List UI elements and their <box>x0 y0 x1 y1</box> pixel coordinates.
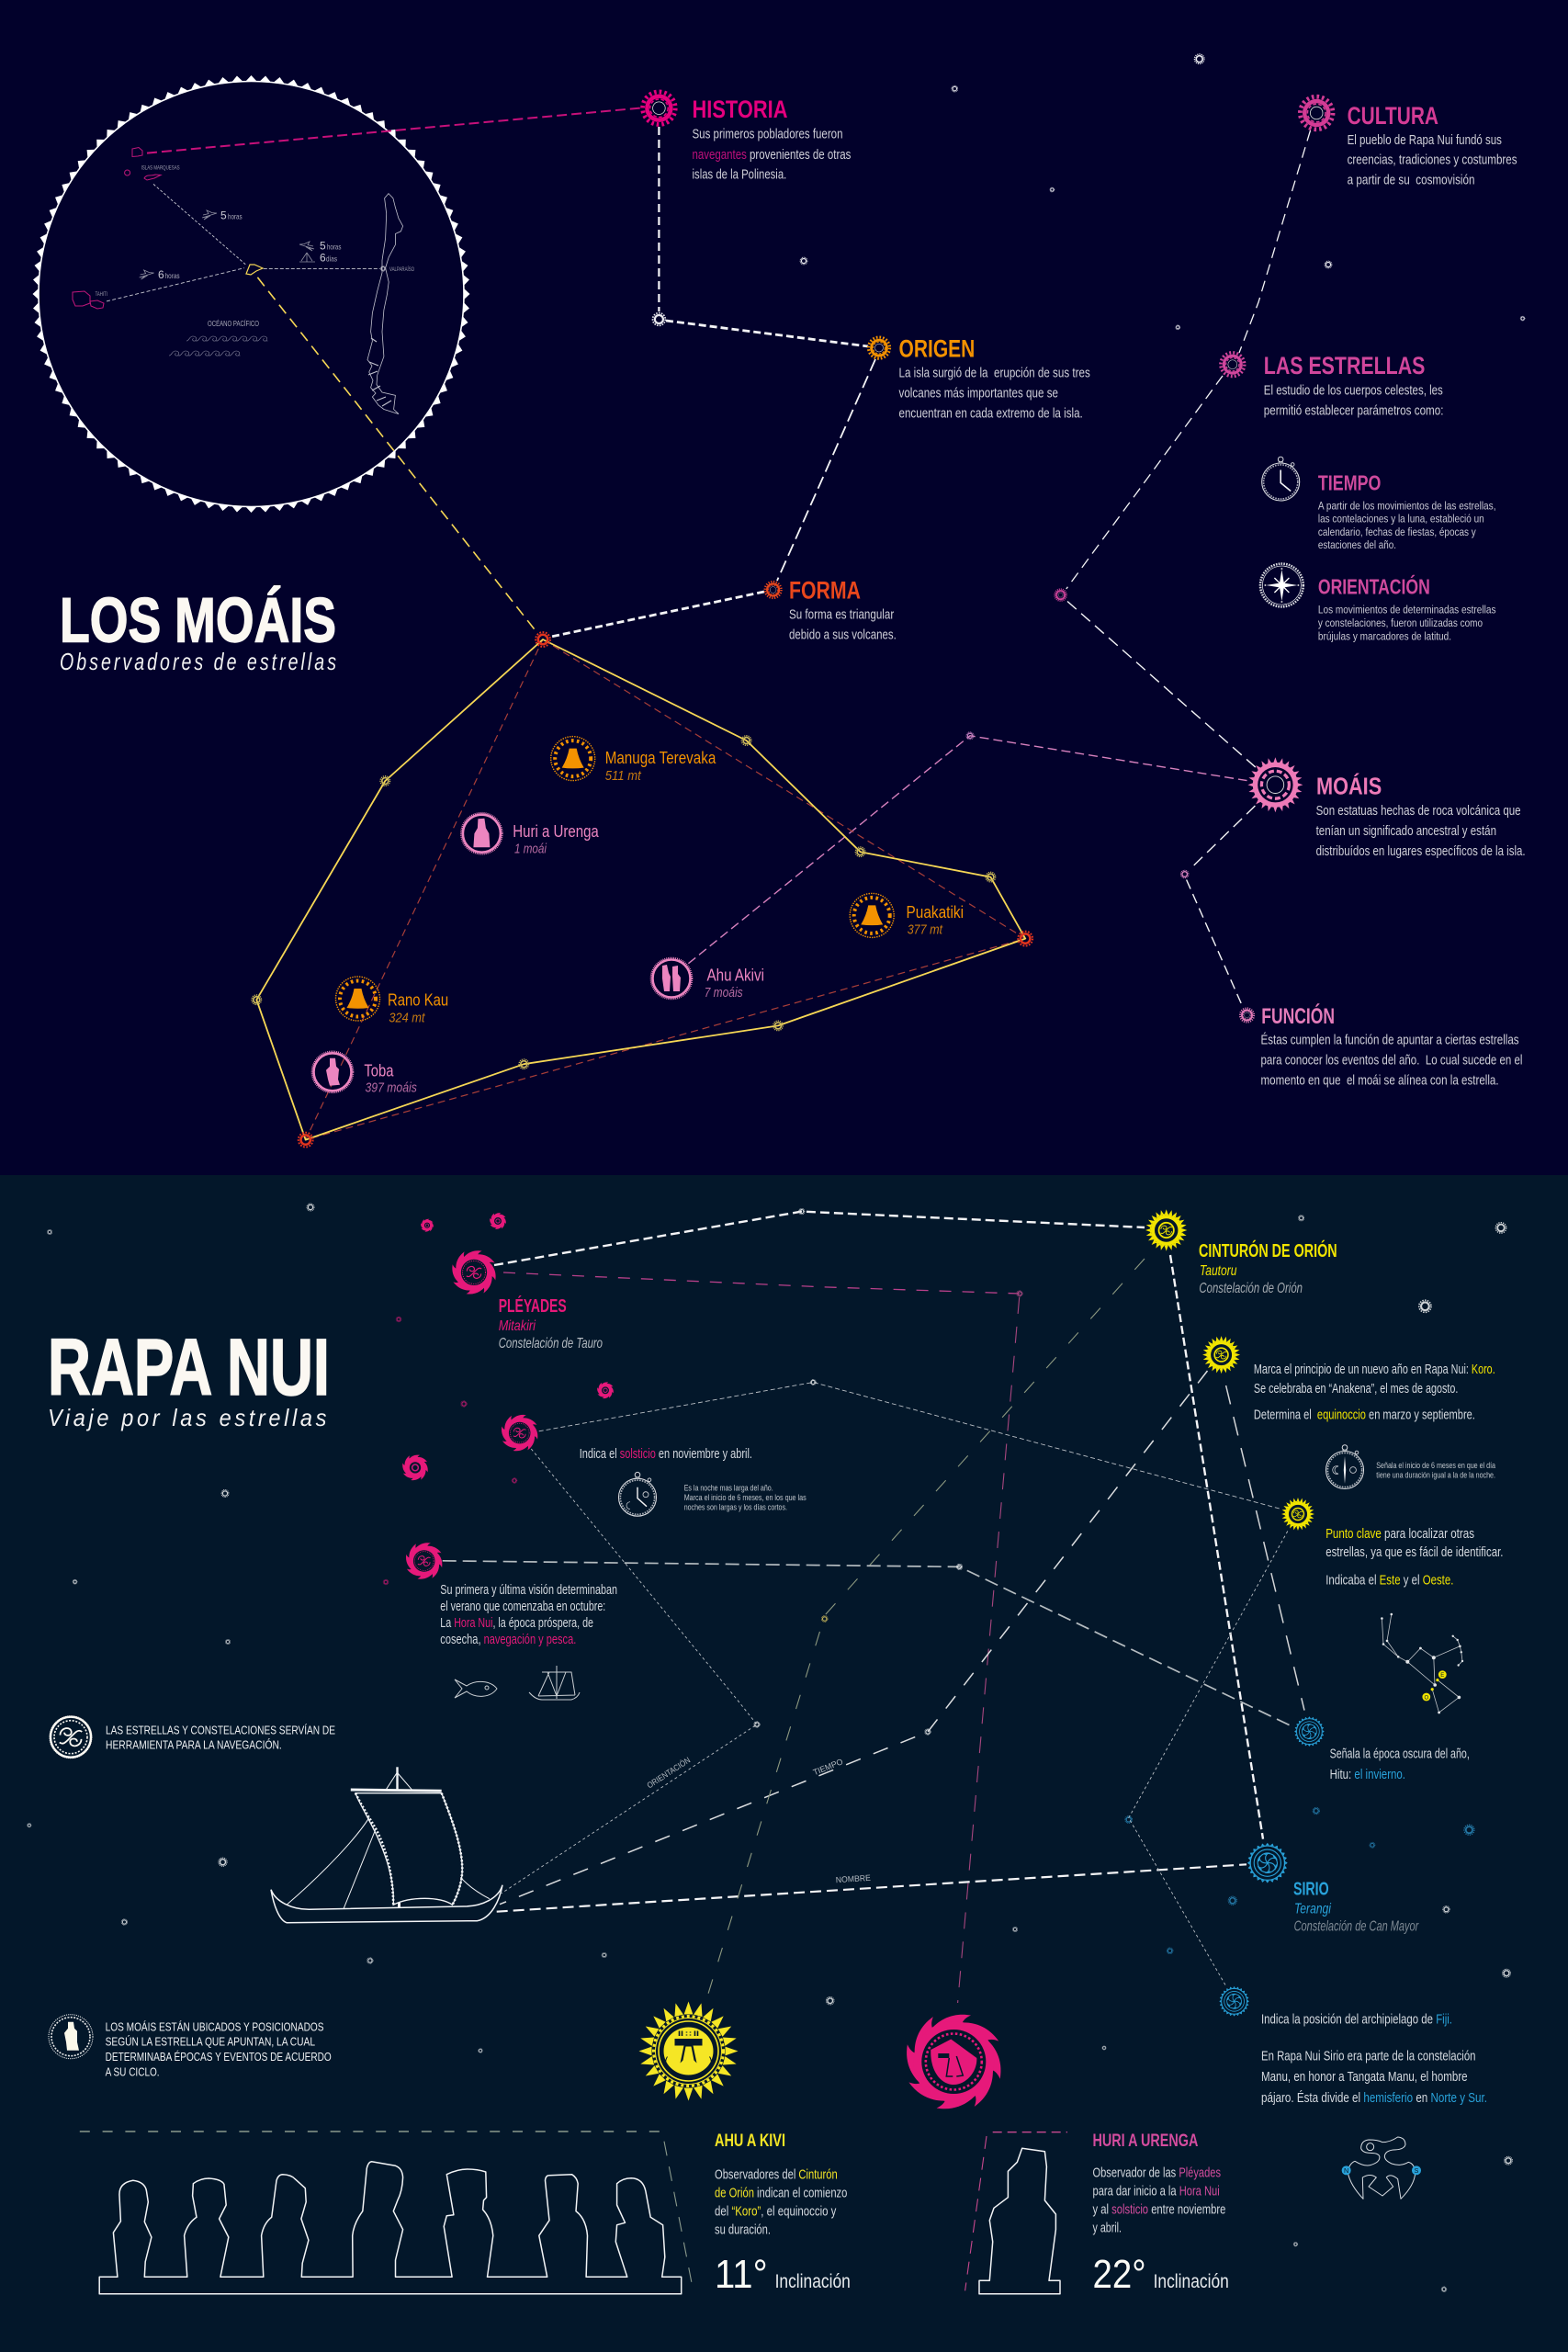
map: labels: ISLAS MARQUESAS <box>141 165 180 171</box>
section: Orientación: brújulas y marcadores de latitud. <box>1318 629 1451 642</box>
location: Rano Kau: 324 mt <box>389 1010 425 1025</box>
block: Koro <box>1193 1329 1496 1488</box>
icon: Ahu a Kivi sun emblem <box>615 1984 751 2131</box>
note: moai positioning: A SU CICLO. <box>106 2064 160 2078</box>
icon: equinox watch <box>1326 1445 1363 1488</box>
star: junction magenta <box>1055 589 1066 601</box>
block: Pléyades solsticio: noches son largas y los días cortos. <box>684 1503 787 1512</box>
block: Punto clave: Punto clave para localizar otras <box>1325 1527 1474 1542</box>
island map: yellow outline <box>256 639 1025 1140</box>
star: small junction lilac <box>1180 870 1189 878</box>
section: Huri a Urenga: HURI A URENGA <box>1093 2132 1199 2151</box>
section: Huri a Urenga: y abril. <box>1093 2221 1122 2235</box>
line junction nodes <box>754 1208 1022 1735</box>
block: Koro: tiene una duración igual a la de la noche. <box>1376 1471 1495 1480</box>
icon: Orion star 2 <box>1193 1329 1246 1385</box>
section: Orientación: y constelaciones, fueron utilizadas como <box>1318 616 1483 629</box>
location: Rano Kau <box>336 977 448 1025</box>
icon: Hitu star <box>1287 1712 1328 1756</box>
section: Ahu a Kivi: 11° <box>715 2252 768 2297</box>
title: Rapa Nui: RAPA NUI <box>48 1323 330 1412</box>
section: Historia: Sus primeros pobladores fueron <box>693 127 843 141</box>
block: Hitu: Señala la época oscura del año, <box>1330 1747 1470 1762</box>
section: Función <box>1240 1003 1523 1089</box>
star group: Cinturón de Orión: CINTURÓN DE ORIÓN <box>1199 1239 1337 1261</box>
location: Puakatiki <box>850 893 964 938</box>
note: moai positioning: LOS MOÁIS ESTÁN UBICADOS Y POSICIONADOS <box>106 2019 324 2033</box>
section: Cultura: creencias, tradiciones y costumbres <box>1348 153 1517 168</box>
small blue stars <box>1125 1807 1474 1954</box>
icon: Huri a Urenga swirl emblem <box>902 2010 1005 2113</box>
section: Origen: ORIGEN <box>898 335 975 363</box>
section: Ahu a Kivi <box>715 2132 851 2297</box>
block: Koro: Determina el equinoccio en marzo y septiembre. <box>1254 1408 1475 1422</box>
illustration: Huri a Urenga moai <box>965 2132 1067 2294</box>
map: labels: OCÉANO PACÍFICO <box>208 320 259 328</box>
background: night sky upper <box>0 0 1568 1175</box>
note: moai positioning: SEGÚN LA ESTRELLA QUE APUNTAN, LA CUAL <box>106 2035 315 2049</box>
icon: Sirio star <box>1237 1837 1293 1895</box>
section: Las Estrellas: El estudio de los cuerpos celestes, les <box>1264 384 1443 399</box>
section: Orientación: Los movimientos de determinadas estrellas <box>1318 603 1495 616</box>
section: Ahu a Kivi: del “Koro”, el equinoccio y <box>715 2205 837 2220</box>
block: Pléyades Hora Nui: Su primera y última visión determinaban <box>440 1583 617 1598</box>
block: Koro: Señala el inicio de 6 meses en que el día <box>1376 1461 1496 1470</box>
icon: Las Estrellas star <box>1221 353 1245 377</box>
star group: Cinturón de Orión <box>1135 1203 1337 1296</box>
icon: moai badge <box>49 2015 93 2059</box>
block: Pléyades Hora Nui: el verano que comenzaba en octubre: <box>440 1600 605 1614</box>
map: travel times: horas <box>327 242 341 251</box>
block: Punto clave <box>1273 1492 1503 1713</box>
line labels: navigation: ORIENTACIÓN <box>645 1756 692 1790</box>
section: Huri a Urenga: Observador de las Pléyades <box>1093 2165 1221 2180</box>
section: Historia: navegantes provenientes de otras <box>693 148 851 163</box>
note: moai positioning <box>49 2015 332 2078</box>
map: labels: TAHITI <box>96 292 107 298</box>
icon: birdman <box>1342 2137 1421 2199</box>
section: Origen <box>868 335 1090 421</box>
section: Tiempo: estaciones del año. <box>1318 538 1396 551</box>
illustration: sailing boat <box>271 1767 502 1923</box>
background stars lower <box>28 1204 1512 2292</box>
section: Orientación <box>1260 564 1495 642</box>
icon: Fiji star <box>1212 1982 1253 2025</box>
map: ocean waves <box>169 336 268 356</box>
section: Ahu a Kivi: de Orión indican el comienzo <box>715 2187 847 2201</box>
block: Pléyades solsticio: Es la noche mas larga del año. <box>684 1484 773 1493</box>
star group: Sirio: SIRIO <box>1293 1880 1329 1900</box>
map: labels: VALPARAÍSO <box>389 266 414 273</box>
note: moai positioning: DETERMINABA ÉPOCAS Y EVENTOS DE ACUERDO <box>106 2050 332 2064</box>
title: Rapa Nui <box>48 1323 330 1431</box>
location: Huri a Urenga: Huri a Urenga <box>513 822 600 841</box>
star group: Sirio: Terangi <box>1294 1901 1331 1917</box>
star group: Cinturón de Orión: Tautoru <box>1200 1263 1236 1279</box>
section: Origen: encuentran en cada extremo de la isla. <box>898 406 1083 421</box>
block: Punto clave: Indicaba el Este y el Oeste. <box>1325 1573 1453 1588</box>
location: Manuga Terevaka <box>551 737 716 784</box>
background: night sky lower <box>0 1175 1568 2352</box>
location: Ahu Akivi: Ahu Akivi <box>707 967 764 985</box>
icon: small boat <box>529 1666 580 1700</box>
location: Huri a Urenga <box>461 813 600 857</box>
map: Chile outline <box>367 194 403 414</box>
location: Toba: 397 moáis <box>366 1080 417 1096</box>
section: Ahu a Kivi: Inclinación <box>775 2271 851 2292</box>
map: travel times: horas <box>228 211 243 220</box>
block: Fiji and Manu: En Rapa Nui Sirio era parte de la constelación <box>1261 2049 1475 2064</box>
constellation lines: right-hand route <box>551 127 1310 1009</box>
section: Tiempo: TIEMPO <box>1318 471 1381 495</box>
line labels: navigation: TIEMPO <box>812 1757 844 1777</box>
title: Los Moáis <box>60 585 339 675</box>
block: Fiji and Manu: Manu, en honor a Tangata Manu, el hombre <box>1261 2070 1468 2085</box>
section: Historia: islas de la Polinesia. <box>693 168 786 183</box>
icon: navigation badge <box>50 1716 92 1758</box>
map: route lines <box>107 184 380 301</box>
icon: Origen star <box>868 337 890 358</box>
map: travel times: días <box>326 254 337 263</box>
section: Función: FUNCIÓN <box>1261 1003 1335 1029</box>
star group: Pléyades <box>450 1249 603 1351</box>
note: navigation: LAS ESTRELLAS Y CONSTELACIONES SERVÍAN DE <box>106 1723 335 1736</box>
block: Pléyades Hora Nui <box>404 1541 617 1700</box>
block: Pléyades Hora Nui: cosecha, navegación y pesca. <box>440 1633 576 1647</box>
connector: yellow dashed map to island <box>257 277 537 633</box>
island map: red dashed triangle <box>306 639 1025 1140</box>
line labels: navigation: NOMBRE <box>836 1873 871 1884</box>
section: Huri a Urenga: para dar inicio a la Hora Nui <box>1093 2184 1220 2199</box>
icon: birdman: N <box>1344 2166 1348 2175</box>
icon: fish <box>455 1679 497 1698</box>
island map: red volcano stars <box>299 632 1032 1148</box>
block: Hitu <box>1287 1712 1470 1782</box>
icon: Pléyades star 3 <box>404 1541 444 1581</box>
location: Rano Kau: Rano Kau <box>388 991 448 1010</box>
section: Tiempo: calendario, fechas de fiestas, épocas y <box>1318 526 1476 538</box>
icon: Pléyades star <box>450 1249 498 1296</box>
small pink stars <box>383 1212 615 1585</box>
location: Ahu Akivi: 7 moáis <box>705 985 743 1001</box>
section: Huri a Urenga: Inclinación <box>1154 2271 1229 2292</box>
constellation lines lower <box>443 1212 1304 2003</box>
icon: night watch <box>619 1472 656 1516</box>
section: Huri a Urenga: y al solsticio entre noviembre <box>1093 2202 1225 2217</box>
star: junction near Ahu Akivi line <box>966 732 974 740</box>
section: Huri a Urenga: 22° <box>1093 2252 1146 2297</box>
icon: birdman: S <box>1415 2166 1419 2175</box>
section: Cultura: CULTURA <box>1348 102 1438 130</box>
section: Origen: volcanes más importantes que se <box>898 386 1058 401</box>
map: travel times: 5 <box>220 209 227 221</box>
title: Rapa Nui: Viaje por las estrellas <box>48 1404 330 1431</box>
block: Koro: Se celebraba en “Anakena”, el mes de agosto. <box>1254 1382 1458 1396</box>
star group: Pléyades: Constelación de Tauro <box>499 1336 603 1351</box>
location: Manuga Terevaka: Manuga Terevaka <box>605 749 716 767</box>
map circle: ocean route map <box>0 0 540 653</box>
note: navigation: HERRAMIENTA PARA LA NAVEGACIÓN. <box>106 1737 282 1751</box>
section: Moáis <box>1234 748 1526 859</box>
block: Fiji and Manu <box>1212 1982 1487 2199</box>
location: Huri a Urenga: 1 moái <box>514 842 547 857</box>
block: Hitu: Hitu: el invierno. <box>1330 1768 1405 1782</box>
title: Los Moáis: Observadores de estrellas <box>60 648 339 675</box>
icon: Forma star <box>765 582 781 598</box>
section: Moáis: Son estatuas hechas de roca volcánica que <box>1316 804 1521 819</box>
block: Pléyades Hora Nui: La Hora Nui, la época próspera, de <box>440 1616 593 1631</box>
section: Forma: FORMA <box>789 576 861 604</box>
map: travel times: horas <box>165 271 180 280</box>
map: islands <box>73 147 161 309</box>
icon: pocket watch <box>1262 457 1300 501</box>
icon: Orion star <box>1135 1203 1192 1263</box>
section: Origen: La isla surgió de la erupción de sus tres <box>898 367 1090 381</box>
icon: Orion star 3 <box>1273 1492 1319 1541</box>
background stars upper <box>800 54 1525 330</box>
section: Tiempo <box>1262 457 1495 551</box>
icon: Orion constellation: E <box>1440 1673 1444 1679</box>
connector: pink dashed Ahu Akivi to Moáis <box>688 736 1247 964</box>
note: navigation <box>50 1716 335 1758</box>
map: travel times: 6 <box>158 268 164 281</box>
star group: Cinturón de Orión: Constelación de Orión <box>1199 1281 1303 1296</box>
block: Pléyades solsticio: Indica el solsticio en noviembre y abril. <box>580 1447 752 1462</box>
icon: Orion constellation: O <box>1424 1695 1428 1701</box>
icon: Función star <box>1240 1008 1254 1023</box>
panel: Los Moáis upper section <box>0 0 1526 1148</box>
map: Valparaíso marker <box>380 266 386 271</box>
section: Forma: debido a sus volcanes. <box>789 628 897 643</box>
section: Ahu a Kivi: Observadores del Cinturón <box>715 2168 838 2183</box>
map: travel times: 5 <box>320 239 326 252</box>
section: Orientación: ORIENTACIÓN <box>1318 574 1430 599</box>
section: Ahu a Kivi: su duración. <box>715 2223 771 2238</box>
map: labels <box>96 165 414 328</box>
icon: Moáis star <box>1234 748 1310 829</box>
block: Fiji and Manu: Indica la posición del archipielago de Fiji. <box>1261 2013 1452 2028</box>
section: Función: momento en que el moái se alínea con la estrella. <box>1260 1074 1499 1089</box>
section: Ahu a Kivi: AHU A KIVI <box>715 2132 785 2151</box>
section: Huri a Urenga <box>1093 2132 1229 2297</box>
section: Tiempo: las contelaciones y la luna, estableció un <box>1318 513 1484 526</box>
block: Punto clave: estrellas, ya que es fácil de identificar. <box>1325 1545 1503 1560</box>
icon: compass <box>1260 564 1303 606</box>
location: Puakatiki: Puakatiki <box>906 903 964 922</box>
section: Tiempo: A partir de los movimientos de las estrellas, <box>1318 499 1495 512</box>
section: Forma <box>765 576 897 643</box>
icon: Pléyades star 2 <box>500 1413 539 1453</box>
section: Cultura <box>1300 96 1517 188</box>
location: Ahu Akivi <box>650 957 764 1001</box>
section: Las Estrellas <box>1221 352 1444 418</box>
block: Pléyades solsticio: Marca el inicio de 6 meses, en los que las <box>684 1493 807 1502</box>
section: Cultura: a partir de su cosmovisión <box>1348 174 1475 188</box>
star group: Pléyades: PLÉYADES <box>499 1295 567 1317</box>
block: Koro: Marca el principio de un nuevo año en Rapa Nui: Koro. <box>1254 1363 1495 1377</box>
star group: Sirio <box>1237 1837 1419 1935</box>
panel: Rapa Nui lower section <box>28 1203 1512 2297</box>
icon: Cultura star <box>1300 96 1333 130</box>
illustration: Ahu a Kivi moai row <box>80 2132 693 2294</box>
location: Manuga Terevaka: 511 mt <box>605 768 642 784</box>
star: white junction <box>653 313 665 325</box>
map: travel times: 6 <box>320 251 326 264</box>
icon: Orion constellation <box>1381 1613 1463 1713</box>
location: Toba <box>312 1051 417 1096</box>
island map: outline nodes <box>252 736 996 1069</box>
section: Moáis: MOÁIS <box>1316 772 1382 799</box>
section: Cultura: El pueblo de Rapa Nui fundó sus <box>1348 133 1502 148</box>
location: Toba: Toba <box>364 1061 394 1080</box>
block: Pléyades solsticio <box>500 1413 807 1516</box>
connector: magenta dashed to Historia <box>147 108 641 153</box>
map: travel times <box>140 209 341 281</box>
icon: Historia star <box>643 92 675 125</box>
star group: Sirio: Constelación de Can Mayor <box>1294 1919 1419 1935</box>
section: Moáis: tenían un significado ancestral y están <box>1316 824 1496 839</box>
section: Las Estrellas: LAS ESTRELLAS <box>1264 352 1425 379</box>
location: Puakatiki: 377 mt <box>908 922 943 938</box>
section: Las Estrellas: permitió establecer parámetros como: <box>1264 403 1444 418</box>
section: Forma: Su forma es triangular <box>789 608 894 623</box>
line labels: navigation <box>645 1756 871 1884</box>
title: Los Moáis: LOS MOÁIS <box>60 585 336 656</box>
map: Easter Island <box>246 265 263 275</box>
section: Historia <box>643 92 851 183</box>
section: Historia: HISTORIA <box>693 96 788 123</box>
star group: Pléyades: Mitakiri <box>499 1318 536 1334</box>
block: Fiji and Manu: pájaro. Ésta divide el hemisferio en Norte y Sur. <box>1261 2090 1487 2106</box>
